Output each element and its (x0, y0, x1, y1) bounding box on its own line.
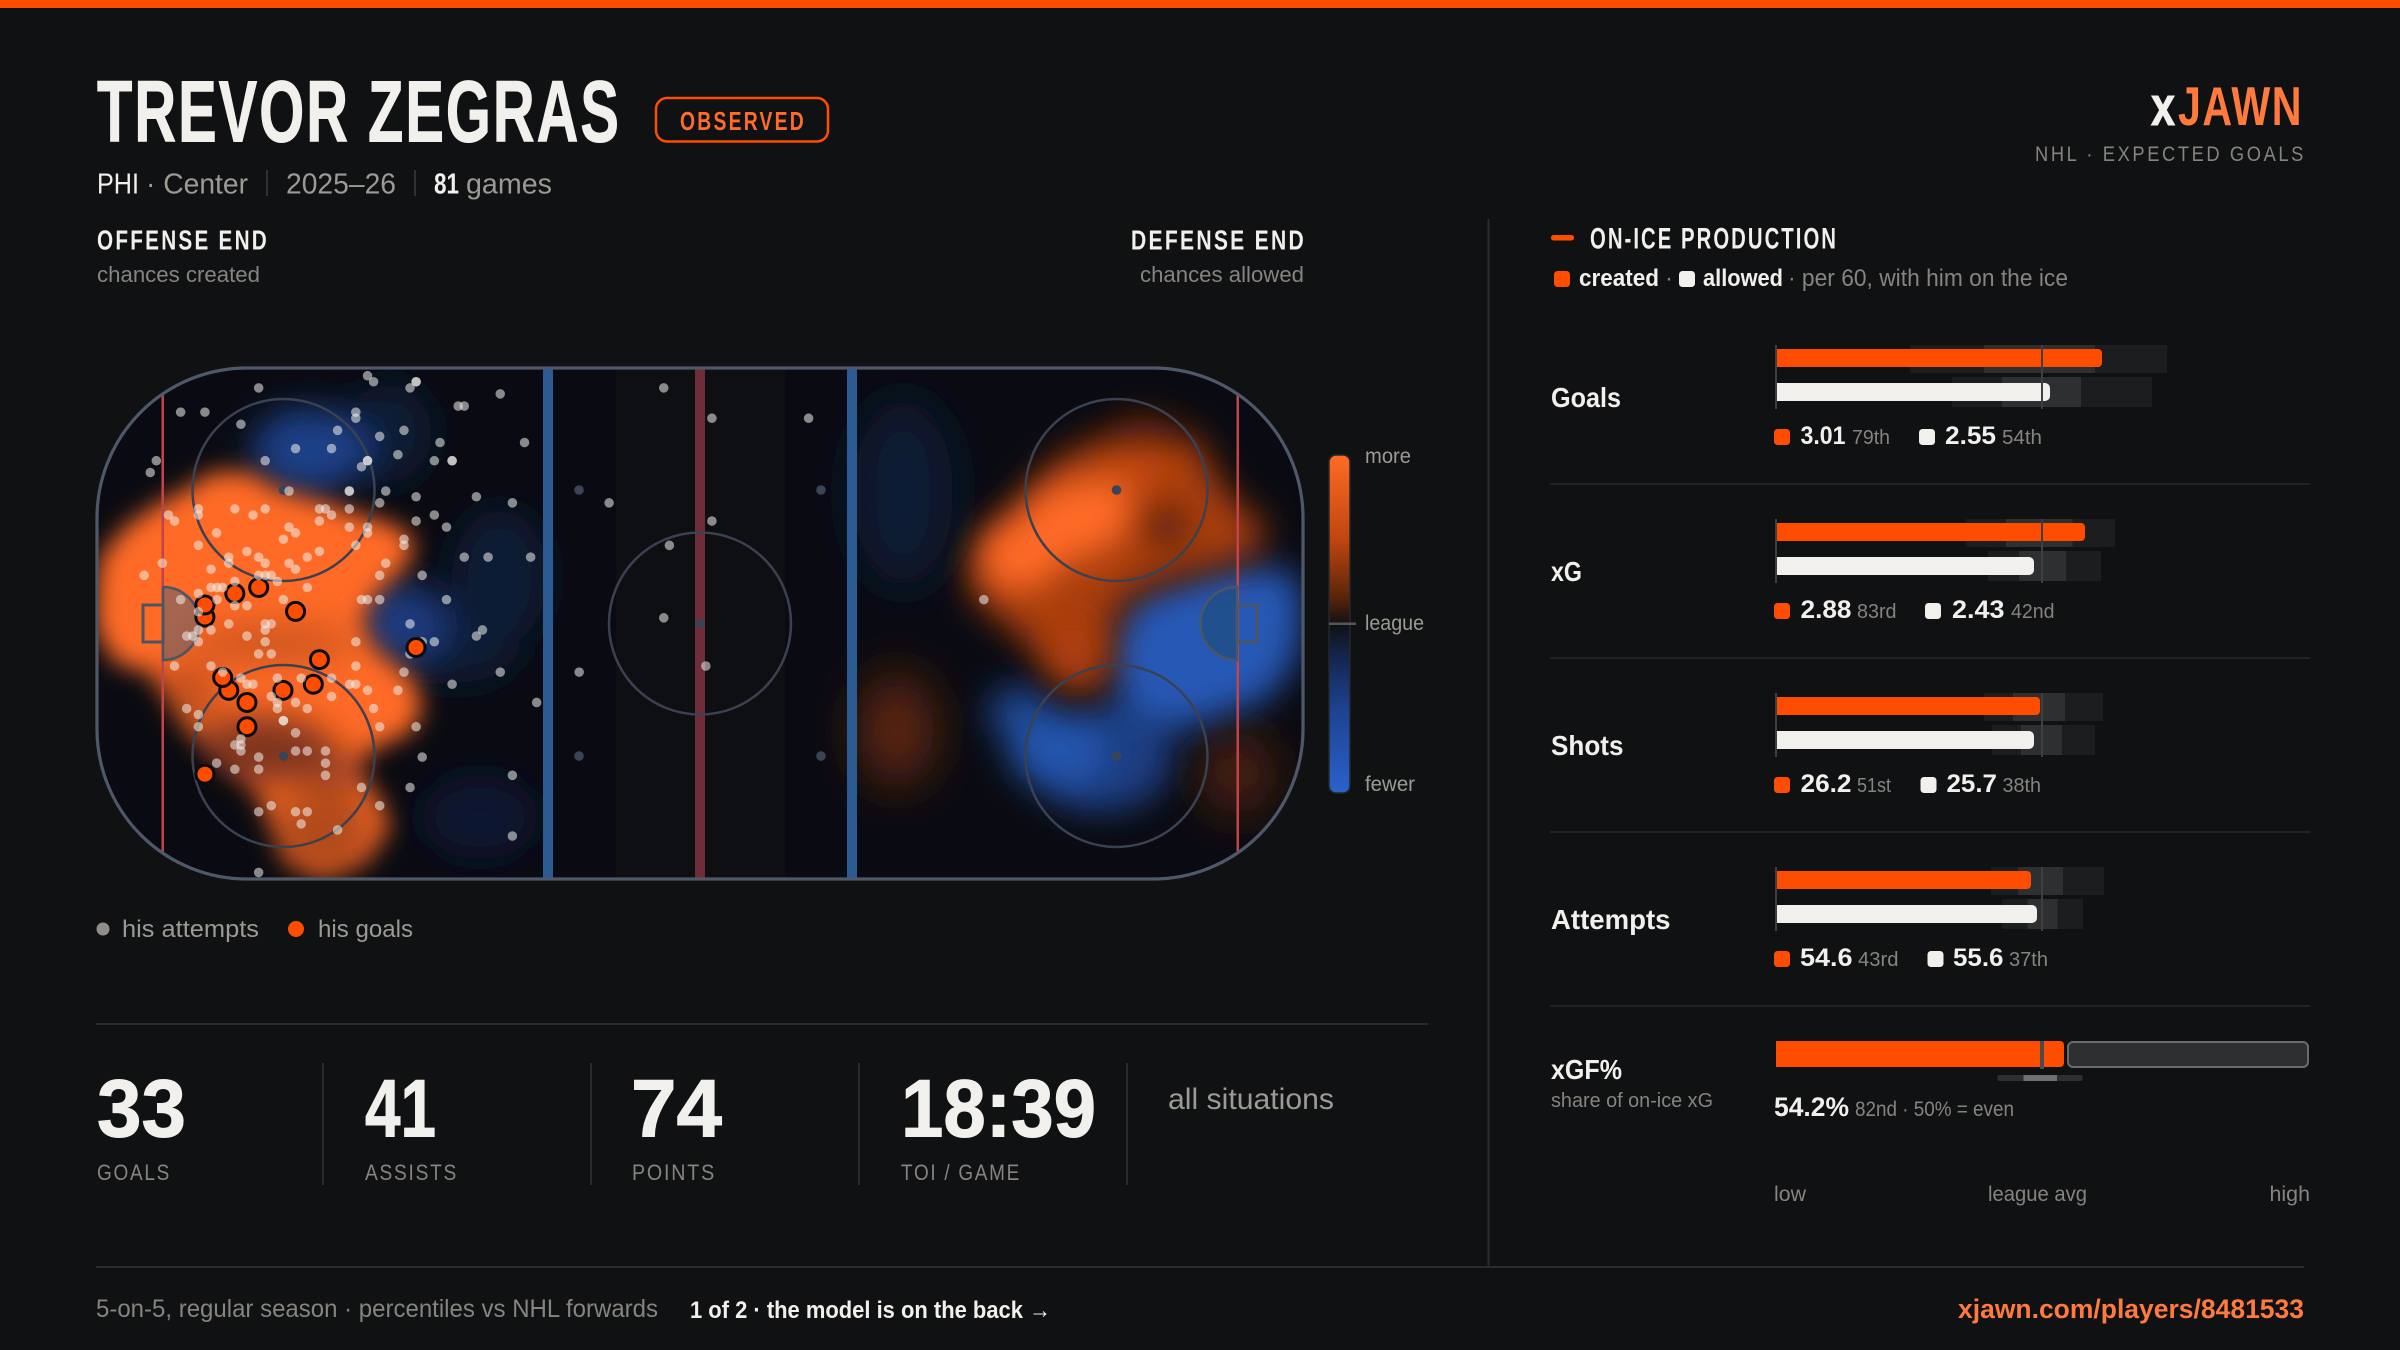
series legend: created (1579, 265, 1659, 292)
stat note: all situations: all situations (1168, 1083, 1334, 1116)
stat: time on ice per game: TOI / GAME (901, 1160, 1021, 1185)
heading: offense end: chances created (97, 262, 260, 287)
faceoff dots (279, 485, 1121, 761)
heat: defense orange (more) (967, 418, 1264, 694)
stat: goals: GOALS (97, 1160, 171, 1185)
bar scale labels: league avg (1988, 1183, 2087, 1206)
row: xG: 2.88 (1800, 596, 1852, 624)
row: shots: 51st (1857, 775, 1891, 797)
heat layers clipped to the rink (96, 368, 1303, 881)
heat map scale legend (1329, 445, 1424, 796)
series legend: · (1665, 265, 1673, 292)
footer (96, 1294, 2304, 1324)
heat map scale legend: more (1365, 445, 1411, 468)
heat: offense blue (fewer) (252, 383, 548, 859)
row: shots: 26.2 (1800, 770, 1852, 798)
row: goals: 79th (1852, 427, 1890, 449)
heading: defense end: DEFENSE END (1131, 224, 1306, 256)
title: TREVOR ZEGRAS (97, 64, 621, 160)
row: shots: Shots (1551, 730, 1624, 761)
row: attempts: 54.6 (1800, 944, 1852, 972)
heat map scale legend: fewer (1365, 773, 1415, 796)
center red line (695, 368, 705, 879)
logo: xJAWN: NHL · EXPECTED GOALS (2035, 143, 2306, 166)
subtitle: team, season, games: · Center (146, 168, 248, 200)
bar scale labels: low (1774, 1183, 1807, 1206)
row: xG: 83rd (1857, 601, 1896, 623)
row: shots: 25.7 (1946, 770, 1997, 798)
stat: assists: ASSISTS (365, 1160, 458, 1185)
row: xGF%: share of on-ice xG (1551, 1090, 1713, 1112)
stat strip (97, 1063, 1334, 1185)
shot dot: goal in the slot over attempts (407, 638, 425, 656)
stat: time on ice per game: 18:39 (901, 1064, 1096, 1154)
panel heading: ON-ICE PRODUCTION (1590, 222, 1838, 256)
shot dots: his attempts (139, 371, 989, 877)
heading: offense end (97, 224, 269, 287)
panel: on-ice production (1550, 222, 2310, 1206)
shot legend: his goals (318, 916, 413, 943)
stat: goals: 33 (97, 1064, 186, 1154)
series legend: · per 60, with him on the ice (1788, 265, 2068, 292)
row: goals: Goals (1551, 382, 1621, 413)
row: xGF%: 54.2% (1774, 1092, 1849, 1122)
bar scale labels: high (2270, 1183, 2310, 1206)
row: shots (1551, 693, 2103, 798)
shot legend (96, 916, 413, 943)
rink surface (97, 368, 1303, 879)
subtitle: team, season, games: PHI (97, 168, 139, 200)
heat: offense orange (more) (96, 472, 423, 881)
heat: defense blue (fewer) (988, 567, 1303, 812)
rink boards (97, 368, 1303, 879)
footer link: xjawn.com/players/8481533 (1958, 1294, 2304, 1324)
row: goals: 3.01 (1800, 422, 1846, 450)
heat: defense dim zones (853, 398, 1273, 815)
rink heat map (96, 368, 1303, 881)
heat: defense orange shading (1083, 416, 1203, 545)
shot dots: his goals (196, 578, 328, 783)
row: xGF% (1551, 1041, 2308, 1122)
logo: xJAWN: x (2151, 75, 2175, 137)
subtitle: team, season, games (97, 168, 552, 200)
faceoff circles (192, 399, 1208, 847)
blue lines (543, 368, 857, 879)
rink markings (143, 368, 1257, 879)
heat: defense orange core (980, 443, 1169, 674)
stat: points: POINTS (632, 1160, 716, 1185)
footer page note: 1 of 2 · the model is on the back → (690, 1297, 1051, 1324)
row: attempts: 43rd (1858, 949, 1898, 971)
bar scale labels (1774, 1183, 2310, 1206)
badge: observed (656, 98, 828, 142)
row: xGF%: xGF% (1551, 1054, 1622, 1085)
row: goals (1551, 345, 2167, 450)
row: attempts: 37th (2009, 949, 2048, 971)
row: xG (1551, 519, 2115, 624)
row: attempts (1551, 867, 2104, 972)
xGF% share bar (1776, 1041, 2308, 1081)
badge: observed: OBSERVED (680, 106, 806, 136)
row: xGF%: 82nd · 50% = even (1855, 1098, 2014, 1121)
logo: xJAWN (2035, 75, 2306, 166)
row: attempts: 55.6 (1953, 944, 2004, 972)
series legend (1554, 265, 2068, 292)
row: goals: 54th (2002, 427, 2042, 449)
goal crease: defense (1200, 587, 1237, 660)
row: xG: 2.43 (1952, 596, 2004, 624)
subtitle: team, season, games: games (466, 168, 552, 200)
goal crease: offense (163, 587, 200, 660)
subtitle: team, season, games: 2025–26 (286, 168, 396, 200)
heading: defense end (1131, 224, 1306, 287)
logo: xJAWN: JAWN (2178, 75, 2303, 137)
goal nets (143, 605, 1257, 642)
subtitle: team, season, games: 81 (434, 168, 459, 200)
series legend: allowed (1703, 265, 1783, 292)
panel heading (1551, 222, 1838, 256)
top accent bar (0, 0, 2400, 8)
row: attempts: Attempts (1551, 904, 1670, 935)
heading: offense end: OFFENSE END (97, 224, 269, 256)
heading: defense end: chances allowed (1140, 262, 1304, 287)
row: xG: 42nd (2011, 601, 2054, 623)
header: player identity (97, 64, 828, 200)
stat: points: 74 (631, 1064, 722, 1154)
goal lines (162, 395, 1239, 852)
heat map scale legend: league (1365, 612, 1424, 635)
footer note: 5-on-5, regular season · percentiles vs NHL forwards (96, 1295, 658, 1323)
stat: assists: 41 (365, 1064, 436, 1154)
row: xG: xG (1551, 556, 1582, 587)
shot legend: his attempts (122, 916, 259, 943)
heat: offense orange shading (157, 621, 373, 878)
row: goals: 2.55 (1945, 422, 1996, 450)
row: shots: 38th (2002, 775, 2041, 797)
